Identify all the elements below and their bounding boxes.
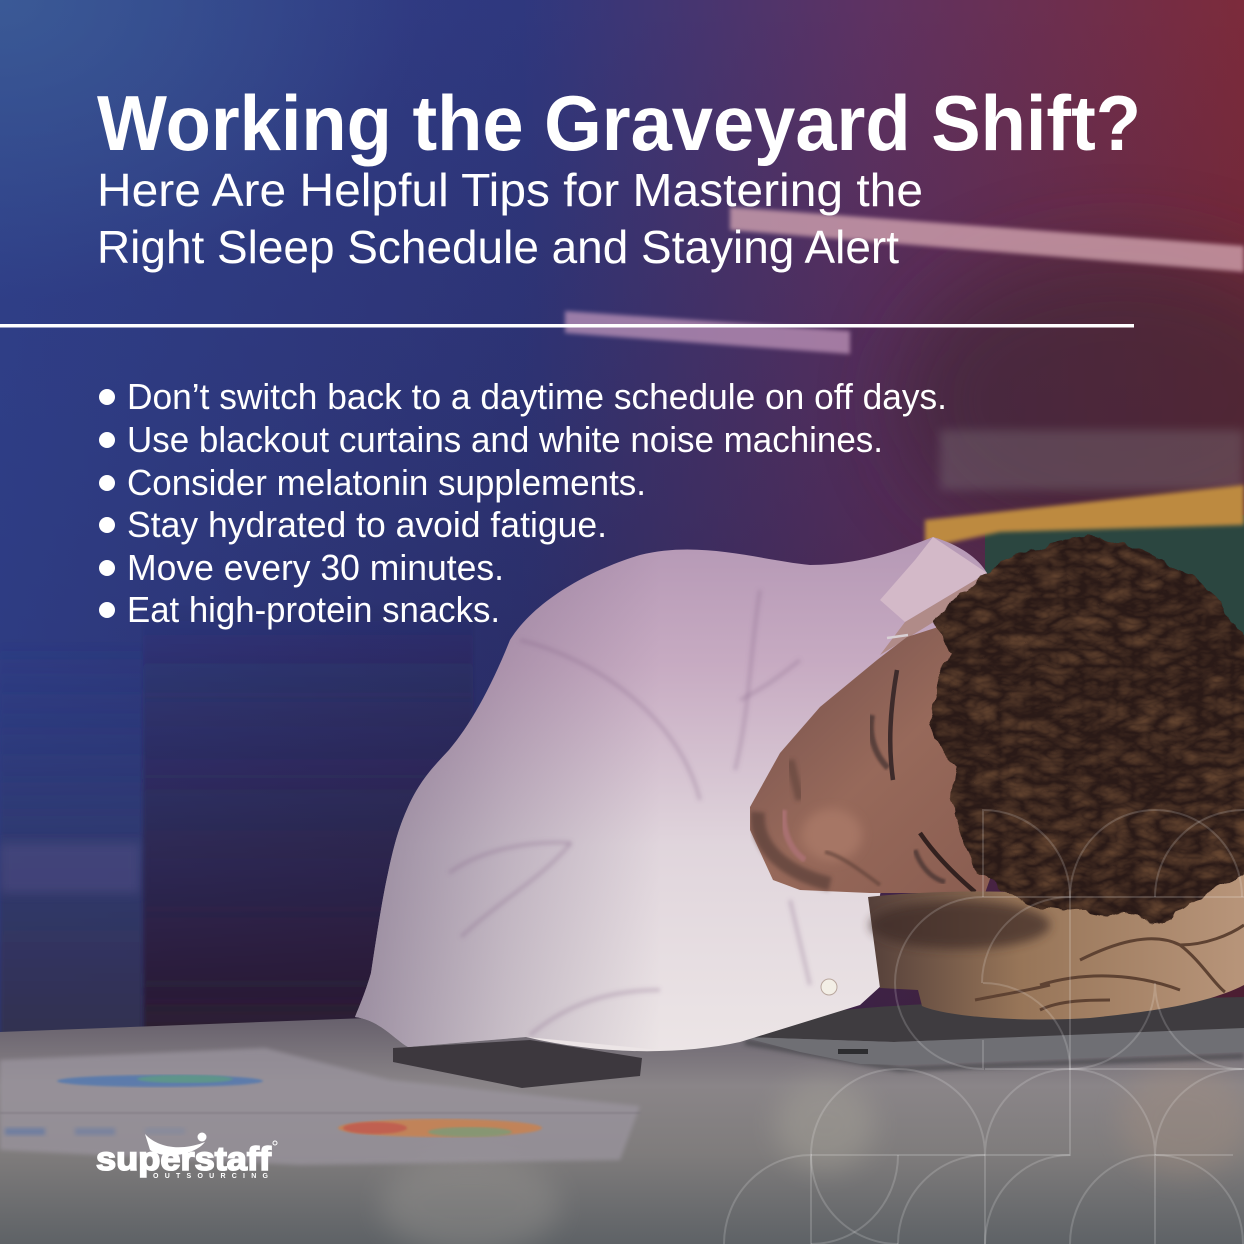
laptop: [742, 997, 1244, 1069]
background chair and left wall: [0, 600, 473, 1040]
tips list: Stay hydrated to avoid fatigue.: [127, 504, 607, 545]
title: Working the Graveyard Shift?: [97, 79, 1141, 167]
tips list: Use blackout curtains and white noise machines.: [127, 419, 883, 460]
papers with charts: [0, 1048, 640, 1165]
tips list: Move every 30 minutes.: [127, 547, 504, 588]
collar: [880, 537, 987, 622]
logo: SuperStaff Outsourcing: [96, 1132, 277, 1180]
shirt folds: [449, 590, 810, 1035]
subtitle: Right Sleep Schedule and Staying Alert: [97, 221, 899, 273]
finger lines: [975, 925, 1244, 1010]
logo: SuperStaff Outsourcing: superstaff: [96, 1140, 272, 1177]
forearm shadow: [870, 901, 1050, 949]
subtitle: [97, 164, 923, 273]
divider: [0, 324, 1134, 328]
logo: SuperStaff Outsourcing: OUTSOURCING: [153, 1173, 269, 1180]
arms and hands: [868, 860, 1244, 1020]
tips list: Eat high-protein snacks.: [127, 589, 500, 630]
cuff button: [821, 979, 837, 995]
shirt: [355, 537, 987, 1051]
hair: [931, 537, 1244, 920]
tips list: Consider melatonin supplements.: [127, 462, 646, 503]
necklace: [887, 635, 908, 638]
tips list: [99, 376, 947, 630]
facial features: [758, 670, 975, 892]
decorative geometric line pattern: [724, 810, 1244, 1244]
tips list: Don’t switch back to a daytime schedule on off days.: [127, 376, 947, 417]
sleeping man: [355, 537, 1244, 1051]
subtitle: Here Are Helpful Tips for Mastering the: [97, 164, 923, 216]
table surface: [0, 1018, 1244, 1244]
face: [750, 620, 1009, 893]
shirt left shading: [355, 555, 660, 1050]
phone on table: [393, 1040, 642, 1088]
background office lights: [565, 207, 1244, 680]
neck: [880, 573, 987, 655]
